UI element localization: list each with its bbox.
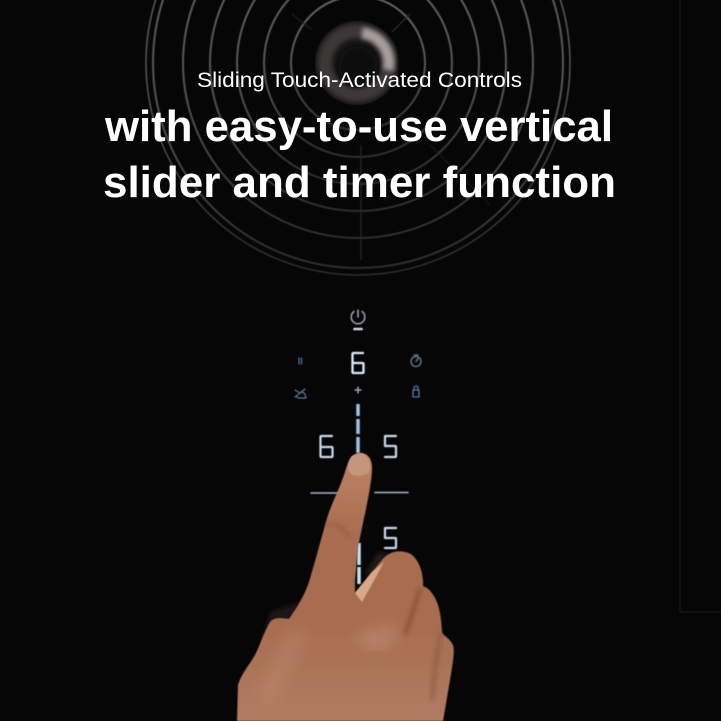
lower zone digit <box>385 528 396 548</box>
lower slider bar <box>357 543 361 584</box>
icon: power <box>351 310 365 329</box>
heading: with easy-to-use vertical <box>104 102 613 151</box>
fan grille <box>146 0 570 275</box>
control panel <box>295 310 421 584</box>
right hob panel outline <box>680 0 721 612</box>
left zone digit <box>320 436 332 457</box>
heading <box>103 102 616 207</box>
hand <box>237 453 454 721</box>
level digit top <box>352 353 364 373</box>
slider bar <box>356 404 360 453</box>
subheading: Sliding Touch-Activated Controls <box>197 69 522 92</box>
finger nail <box>348 453 370 476</box>
icon: pause <box>299 358 302 364</box>
fan hub <box>315 21 399 105</box>
plus <box>355 387 361 393</box>
icon: lock <box>413 386 419 397</box>
icon: boost <box>295 389 306 398</box>
divider line <box>311 492 408 494</box>
icon: timer <box>411 355 421 366</box>
heading: slider and timer function <box>103 158 616 207</box>
right zone digit <box>385 436 396 457</box>
finger shading <box>325 524 350 537</box>
thumb nail <box>355 562 384 602</box>
